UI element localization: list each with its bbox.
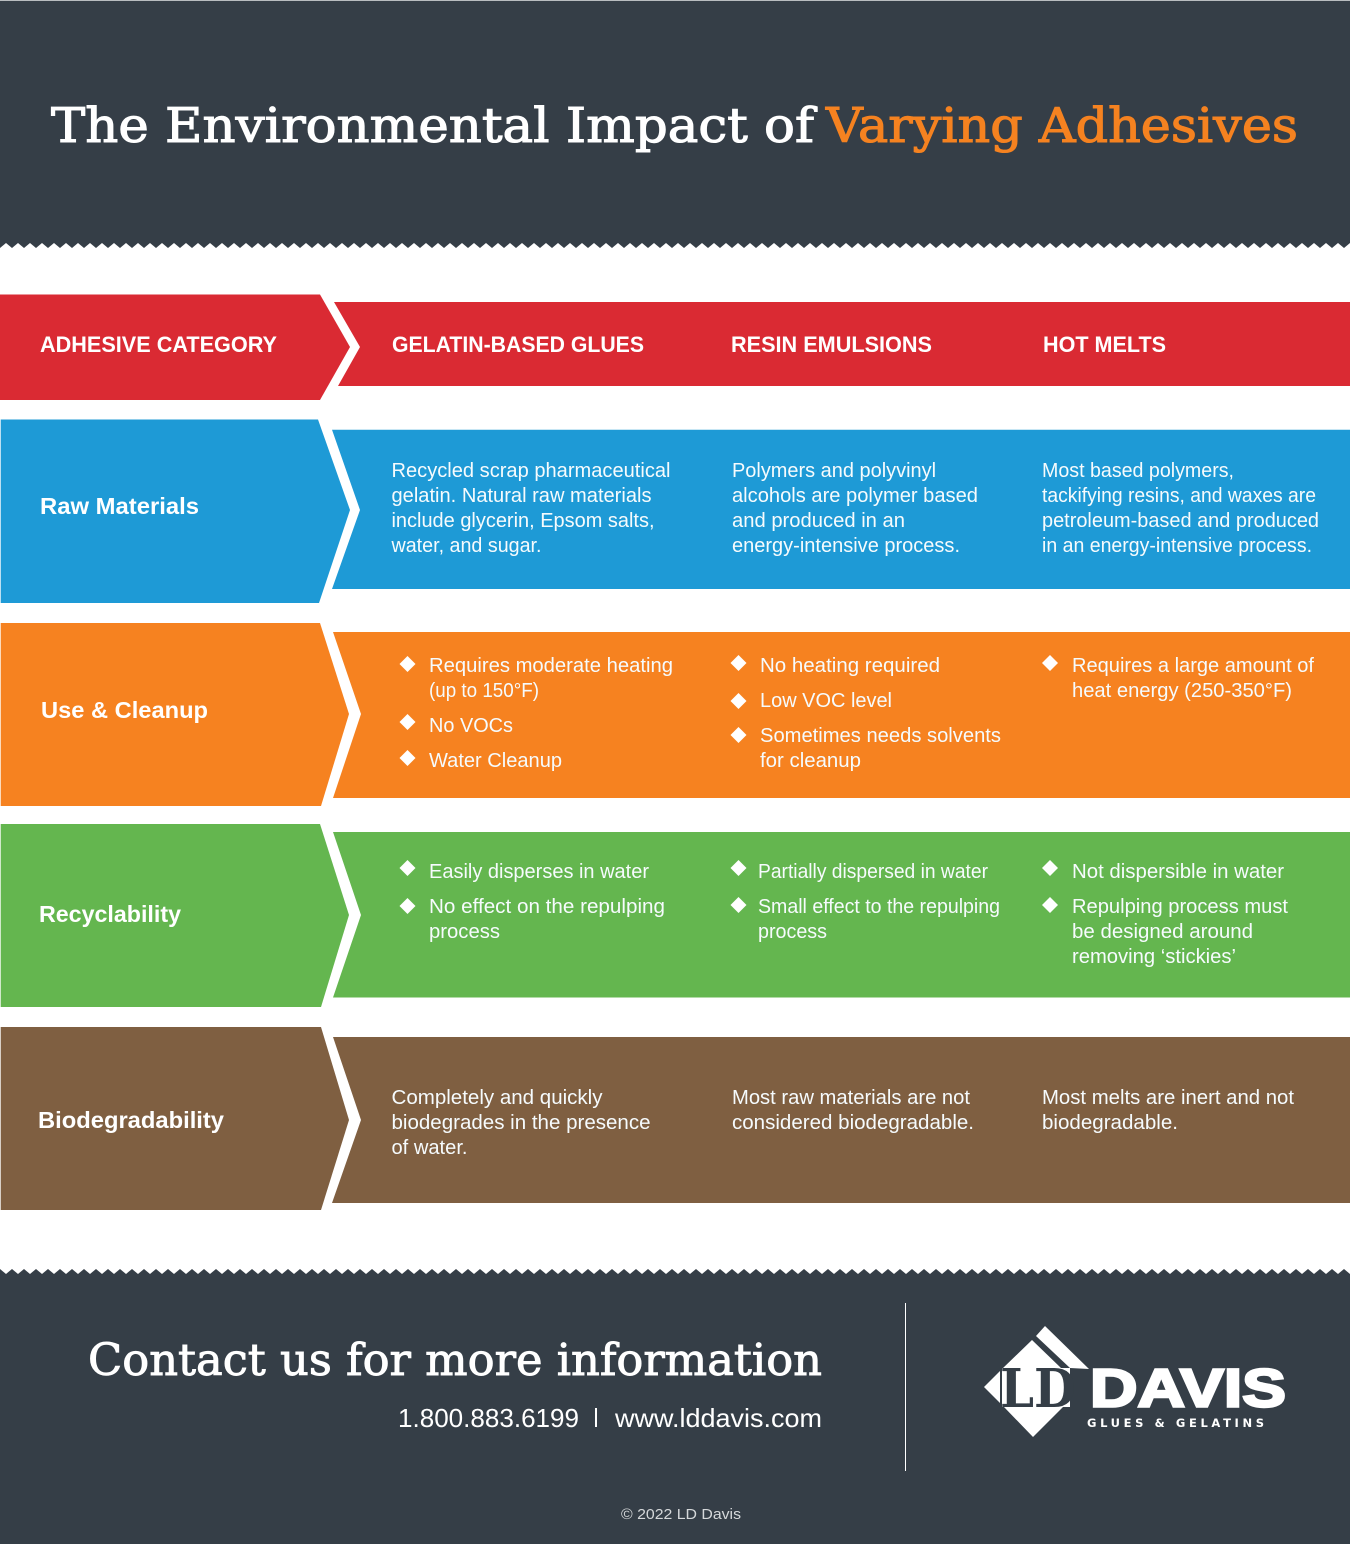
row: raw materials: Polymers and polyvinyl <box>732 460 936 482</box>
row: recyclability: removing ‘stickies’ <box>1072 946 1236 968</box>
row: use and cleanup: Requires a large amount of <box>1072 655 1314 677</box>
row: biodegradability: Completely and quickly <box>392 1087 602 1109</box>
row: adhesive category header: RESIN EMULSIONS <box>731 332 932 357</box>
title: The Environmental Impact of <box>51 98 817 154</box>
row: raw materials: tackifying resins, and waxes are <box>1042 485 1316 507</box>
row: biodegradability: biodegrades in the presence <box>392 1112 650 1134</box>
row: biodegradability: Biodegradability <box>38 1107 224 1133</box>
row: use and cleanup: No heating required <box>760 655 940 677</box>
row: raw materials: Most based polymers, <box>1042 460 1234 482</box>
row: biodegradability: of water. <box>392 1137 468 1159</box>
contact details: 1.800.883.6199 <box>398 1403 579 1433</box>
row: use and cleanup: Low VOC level <box>760 690 892 712</box>
contact heading: Contact us for more information <box>88 1335 822 1386</box>
row: raw materials: Recycled scrap pharmaceutical <box>392 460 670 482</box>
row: recyclability: Small effect to the repulping <box>758 896 1000 918</box>
row: raw materials <box>1 420 1350 603</box>
row: use and cleanup: No VOCs <box>429 715 513 737</box>
logo: LD Davis: LD <box>1000 1358 1076 1420</box>
title: Varying Adhesives <box>825 98 1298 154</box>
row: adhesive category header: HOT MELTS <box>1043 332 1166 357</box>
row: recyclability: Partially dispersed in water <box>758 861 988 883</box>
row: use and cleanup: Sometimes needs solvents <box>760 725 1001 747</box>
footer band <box>0 1269 1350 1544</box>
row: use and cleanup: Use & Cleanup <box>41 697 208 723</box>
row: use and cleanup: heat energy (250-350°F) <box>1072 680 1292 702</box>
row: recyclability: Repulping process must <box>1072 896 1288 918</box>
logo: LD Davis: DAVIS <box>1090 1358 1286 1418</box>
footer divider <box>905 1303 906 1471</box>
row: adhesive category header: GELATIN-BASED GLUES <box>392 332 644 357</box>
row: recyclability: process <box>758 921 827 943</box>
row: biodegradability <box>1 1027 1350 1210</box>
contact details <box>398 1403 822 1433</box>
row: adhesive category header <box>0 294 1350 400</box>
row: use and cleanup: Water Cleanup <box>429 750 562 772</box>
row: biodegradability: biodegradable. <box>1042 1112 1178 1134</box>
row: biodegradability: Most melts are inert and not <box>1042 1087 1294 1109</box>
logo: LD Davis <box>984 1326 1286 1437</box>
row: raw materials: Raw Materials <box>40 493 199 519</box>
row: use and cleanup: (up to 150°F) <box>429 680 539 702</box>
header band <box>0 0 1350 248</box>
row: recyclability <box>1 824 1350 1007</box>
row: adhesive category header: ADHESIVE CATEGORY <box>40 332 277 357</box>
row: use and cleanup: Requires moderate heating <box>429 655 673 677</box>
row: raw materials: petroleum-based and produced <box>1042 510 1319 532</box>
row: raw materials: water, and sugar. <box>391 535 542 557</box>
row: use and cleanup: for cleanup <box>760 750 861 772</box>
row: raw materials: alcohols are polymer based <box>732 485 978 507</box>
row: raw materials: in an energy-intensive process. <box>1042 535 1312 557</box>
row: biodegradability: Most raw materials are not <box>732 1087 970 1109</box>
row: recyclability: process <box>429 921 500 943</box>
row: recyclability: Not dispersible in water <box>1072 861 1284 883</box>
row: raw materials: energy-intensive process. <box>732 535 960 557</box>
row: biodegradability: considered biodegradable. <box>732 1112 974 1134</box>
contact details: www.lddavis.com <box>614 1403 822 1433</box>
row: recyclability: No effect on the repulping <box>429 896 665 918</box>
row: recyclability: be designed around <box>1072 921 1253 943</box>
row: raw materials: and produced in an <box>732 510 905 532</box>
copyright: © 2022 LD Davis <box>621 1506 741 1523</box>
row: raw materials: include glycerin, Epsom salts, <box>392 510 654 532</box>
row: recyclability: Easily disperses in water <box>429 861 649 883</box>
logo: LD Davis: GLUES & GELATINS <box>1087 1416 1264 1430</box>
title <box>51 98 1298 154</box>
row: raw materials: gelatin. Natural raw materials <box>392 485 652 507</box>
row: recyclability: Recyclability <box>39 901 181 927</box>
row: use and cleanup <box>1 623 1350 806</box>
